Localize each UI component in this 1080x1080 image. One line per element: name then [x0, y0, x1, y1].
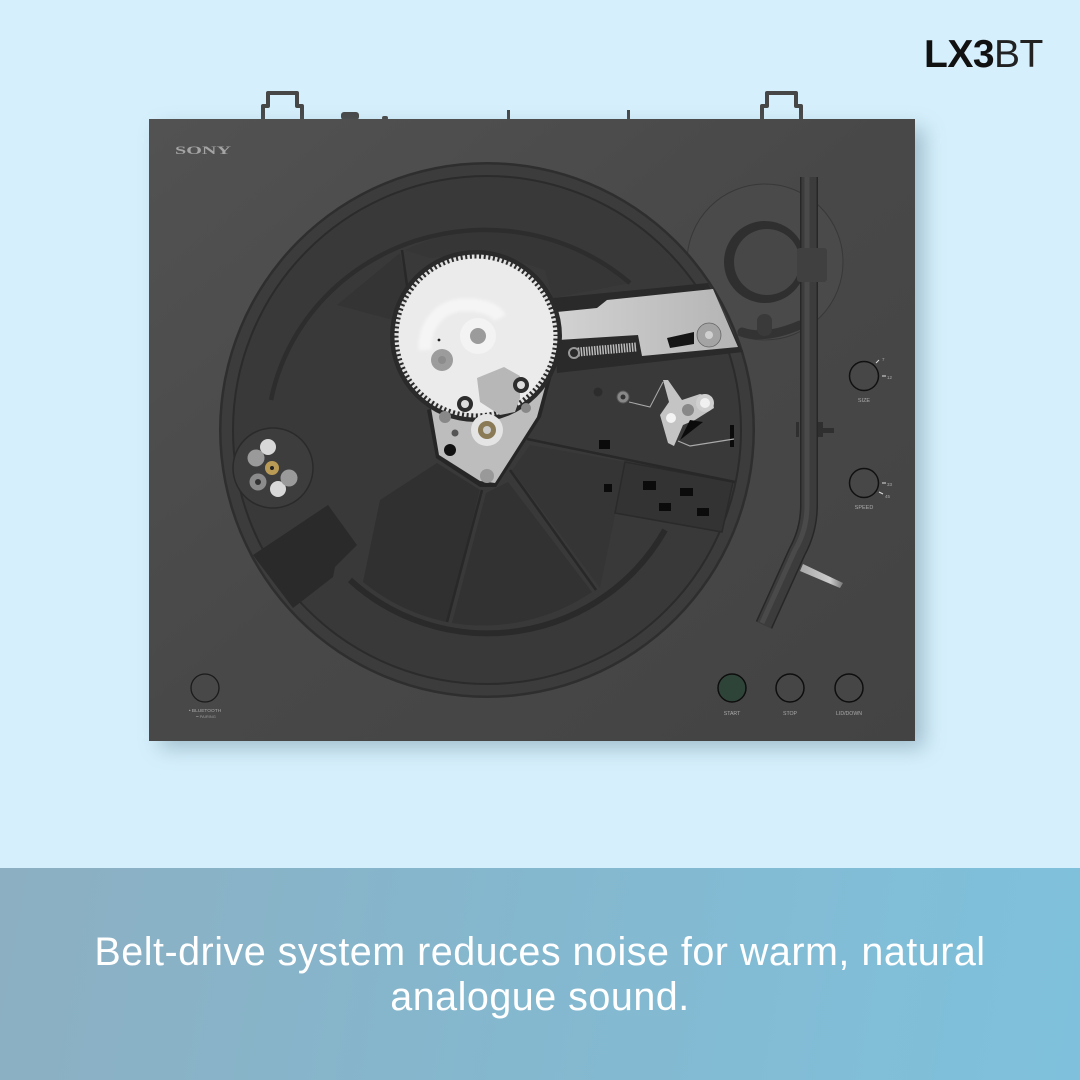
SIZE knob [850, 357, 893, 404]
cue rest [742, 314, 800, 336]
upper pocket [337, 253, 408, 320]
SIZE knob: 12 [887, 375, 893, 380]
start button [718, 674, 746, 717]
stop button: STOP [783, 711, 798, 717]
lower curved ridge [350, 530, 665, 633]
SPEED knob: 33 [887, 482, 893, 487]
board shadow [160, 128, 924, 748]
pocket ribs [402, 250, 735, 622]
rocker lever mechanism [594, 380, 734, 446]
caption text [94, 930, 986, 1019]
top right pocket [405, 230, 630, 298]
caption text: analogue sound. [390, 975, 690, 1019]
lower pocket left [363, 463, 480, 622]
SIZE knob: SIZE [858, 398, 870, 404]
tonearm [762, 177, 827, 625]
stop button [776, 674, 804, 717]
SPEED knob: 45 [885, 494, 891, 499]
lid up/down button: LID/DOWN [836, 711, 862, 717]
lower pocket middle [452, 482, 592, 625]
start button: START [724, 711, 741, 717]
caption band [0, 868, 1080, 1080]
tension spring [569, 347, 636, 358]
finger lift [800, 564, 843, 588]
caption text: Belt-drive system reduces noise for warm, natural [94, 930, 986, 974]
battery-shaped pocket [253, 505, 357, 608]
counterweight [724, 221, 806, 303]
arm clamp [796, 422, 834, 437]
silver slide arm [557, 289, 738, 356]
platter outer ring [219, 162, 755, 698]
metal plate under gear [427, 375, 552, 487]
SONY logo: SONY [175, 143, 232, 157]
cam detail on gear [425, 305, 500, 350]
lower pocket right [512, 445, 625, 588]
silver slide arm slot [553, 283, 743, 373]
arm slot and pivot [667, 323, 721, 348]
turntable board [149, 119, 915, 741]
black slot holes [599, 425, 734, 516]
upper curved ridge [271, 230, 630, 400]
model logo: LX3BT [924, 33, 1043, 76]
rectangular pocket [615, 462, 733, 532]
pinch roller and plate screws [439, 403, 531, 483]
SPEED knob [850, 468, 893, 511]
bluetooth button [189, 674, 222, 719]
bluetooth button: • BLUETOOTH [189, 708, 222, 714]
lid up/down button [835, 674, 863, 717]
SPEED knob: SPEED [855, 505, 873, 511]
tonearm base circle [687, 184, 843, 340]
SIZE knob: 7 [882, 357, 885, 362]
clips: dust cover hinges [263, 93, 801, 119]
rear connectors [341, 110, 630, 120]
white gear [390, 250, 562, 422]
platter mechanism [219, 162, 755, 698]
left small disc with screws [233, 428, 313, 508]
bluetooth button: ━ PAIRING [195, 714, 216, 719]
